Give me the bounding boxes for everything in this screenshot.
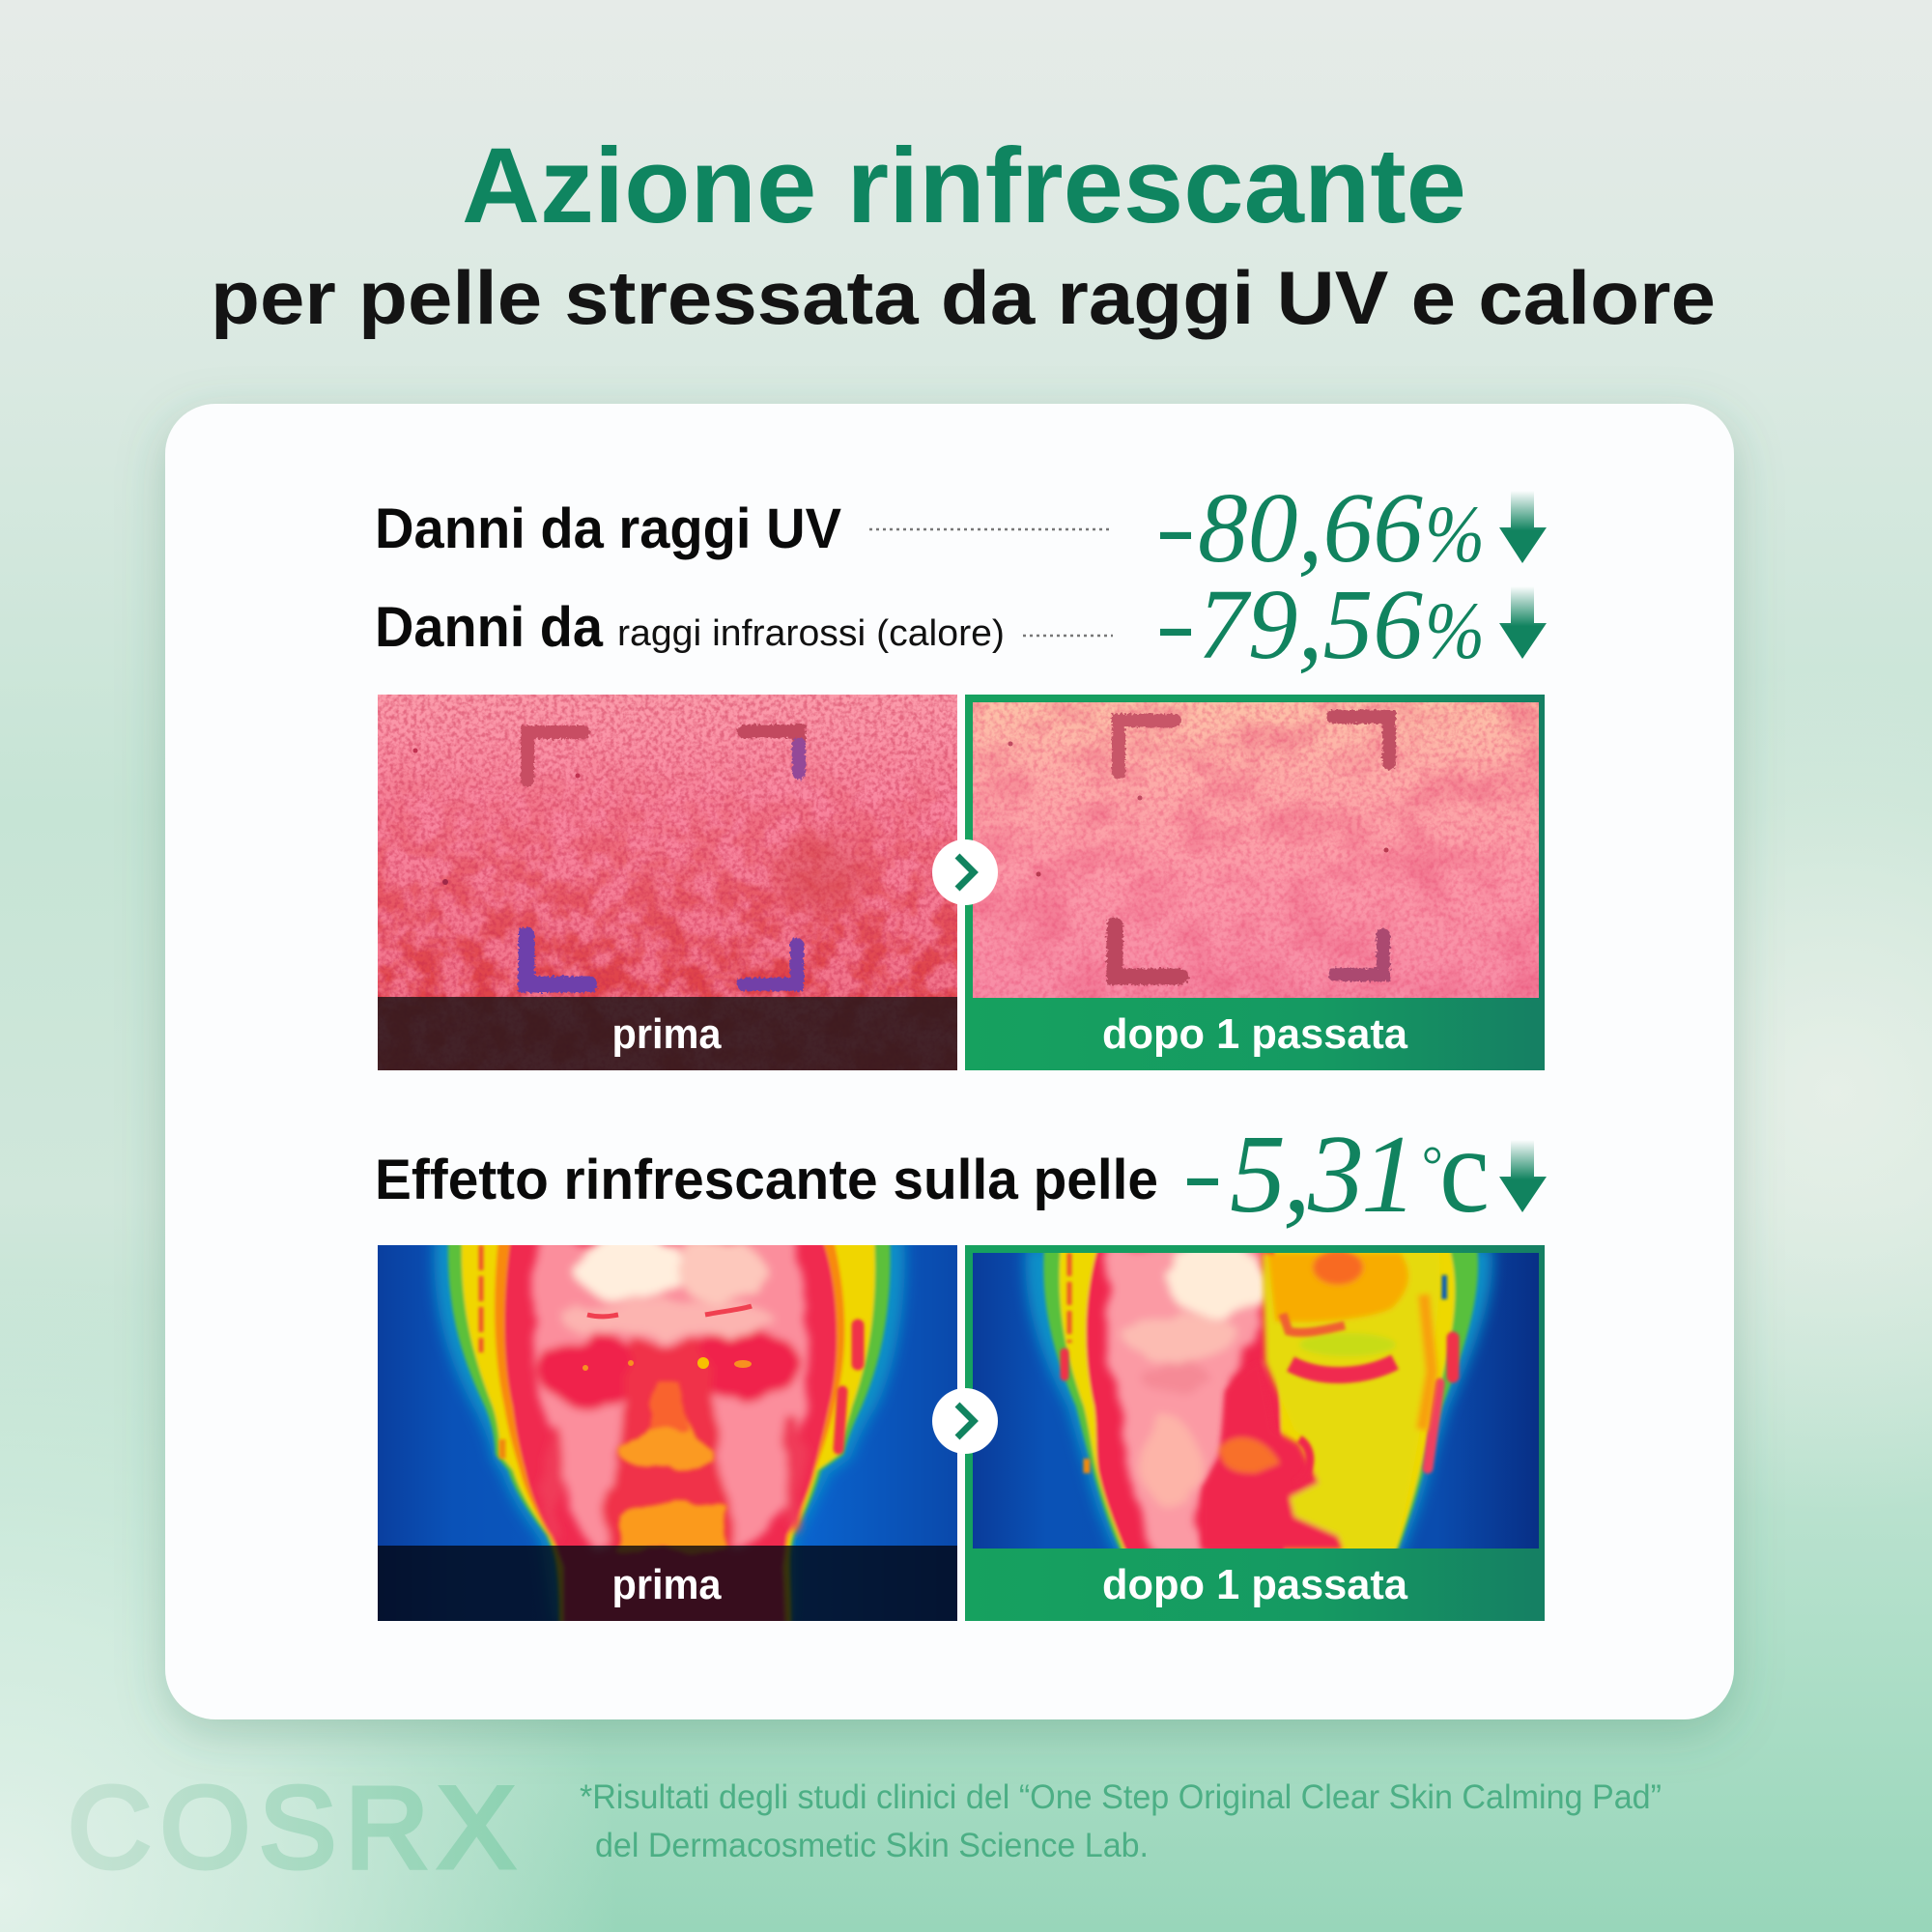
stat row: UV damage [375,472,1547,583]
stat row: infrared damage: % [1425,586,1485,676]
title [211,127,1716,340]
caption: dopo 1 passata: dopo 1 passata [1102,1010,1408,1058]
stat row: skin cooling: c [1439,1104,1490,1238]
stat row: skin cooling: – [1185,1139,1220,1216]
footnote: del Dermacosmetic Skin Science Lab. [595,1827,1149,1864]
footnote: *Risultati degli studi clinici del “One Step Original Clear Skin Calming Pad” [580,1778,1662,1816]
stat row: skin cooling: ° [1420,1136,1441,1196]
stat row: UV damage: % [1425,490,1485,580]
stat row: skin cooling [375,1104,1547,1238]
icon: next arrow [932,1388,998,1454]
stat row: infrared damage: raggi infrarossi (calore) [617,613,1005,654]
icon: down arrow [1499,1140,1547,1212]
photo: skin before [378,695,957,1070]
stat row: skin cooling: 5,31 [1230,1113,1417,1236]
stat row: UV damage: 80,66 [1198,472,1423,583]
stat row: infrared damage: Danni da [375,596,604,659]
caption: prima [378,1546,957,1621]
stat row: infrared damage: 79,56 [1198,569,1423,680]
photo: thermal after [965,1243,1545,1621]
stat row: infrared damage: – [1158,589,1193,667]
photo: thermal before [378,1233,957,1623]
stat row: infrared damage [375,569,1547,680]
caption: prima: prima [612,1561,722,1608]
stat row: skin cooling: Effetto rinfrescante sulla pelle [375,1149,1158,1211]
heading: subtitle: per pelle stressata da raggi UV e calore [211,255,1716,340]
panel: results card [165,404,1734,1719]
footnote [580,1778,1662,1864]
caption: dopo 1 passata: dopo 1 passata [1102,1561,1408,1608]
logo: COSRX: COSRX [68,1763,515,1892]
stat row: UV damage: – [1158,493,1193,570]
icon: down arrow [1499,491,1547,563]
icon: down arrow [1499,586,1547,659]
photo: skin after [965,695,1545,1070]
caption: prima: prima [612,1010,722,1058]
icon: next arrow [932,839,998,905]
stat row: UV damage: Danni da raggi UV [375,497,841,560]
heading: main: Azione rinfrescante [462,127,1466,245]
caption: prima [378,997,957,1070]
